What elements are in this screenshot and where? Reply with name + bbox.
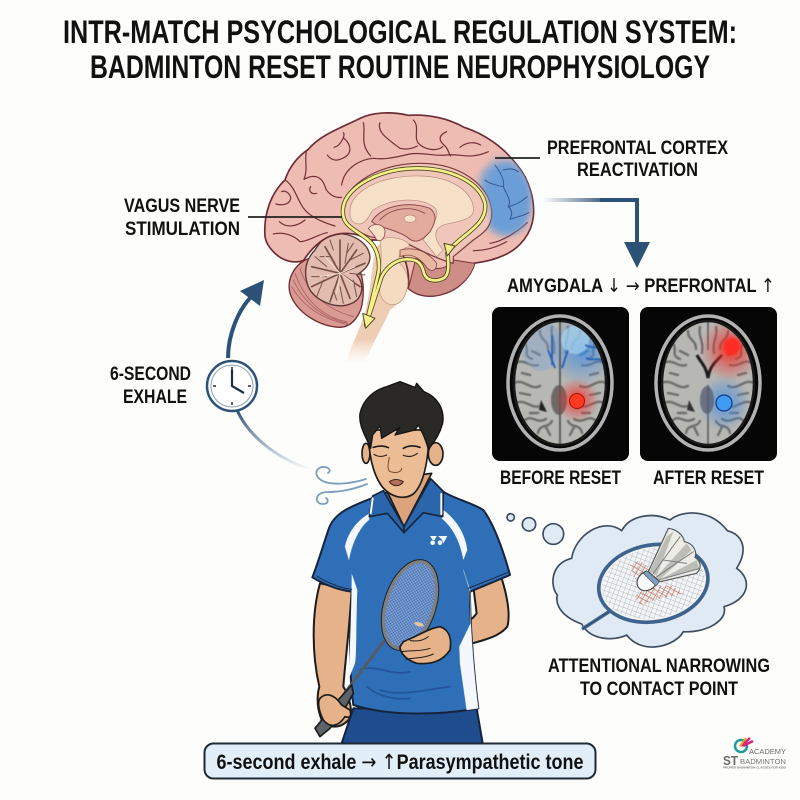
player shorts — [342, 708, 483, 743]
logo: academy badminton: BADMINTON — [740, 757, 786, 766]
icon: breath swirls — [316, 467, 367, 504]
panel: brain scan after reset — [640, 307, 777, 461]
racket close-up — [583, 536, 714, 631]
logo: academy badminton: PROPER BADMINTON CLASSES FOR KIDS — [723, 766, 786, 770]
label: vagus nerve stimulation — [124, 196, 342, 240]
shuttlecock — [637, 528, 700, 591]
cloud shape — [553, 513, 746, 647]
lower dark lobe — [408, 257, 475, 296]
callout: exhale and parasympathetic tone — [204, 744, 596, 778]
thalamus — [372, 205, 435, 241]
player hair — [360, 382, 443, 449]
label: prefrontal cortex reactivation: REACTIVATION — [577, 160, 698, 181]
label: prefrontal cortex reactivation — [495, 138, 728, 181]
logo: academy badminton: ACADEMY — [749, 747, 786, 756]
player illustration — [312, 382, 510, 743]
player face — [362, 430, 443, 497]
label: 6-second exhale: 6-SECOND — [110, 364, 191, 385]
panel: brain scan before reset — [492, 307, 629, 461]
logo: academy badminton — [723, 738, 786, 770]
label: attentional narrowing — [548, 656, 770, 700]
caption: after reset: AFTER RESET — [653, 468, 764, 489]
cerebellum — [289, 234, 370, 327]
cerebrum outline — [265, 113, 534, 296]
player right arm — [400, 578, 509, 664]
icon: clock — [207, 361, 257, 411]
callout: exhale and parasympathetic tone: 6-second exhale → ↑Parasympathetic tone — [216, 750, 584, 774]
player collar — [369, 479, 443, 533]
label: attentional narrowing: ATTENTIONAL NARROWING — [548, 656, 770, 677]
logo: academy badminton: ST — [723, 753, 738, 768]
prefrontal veins — [485, 165, 529, 219]
thought bubbles — [507, 514, 564, 544]
brainstem — [346, 241, 409, 363]
shirt logo — [430, 536, 447, 545]
label: 6-second exhale: EXHALE — [123, 387, 187, 408]
label: vagus nerve stimulation: STIMULATION — [125, 219, 240, 240]
cortical gyri folds — [273, 120, 527, 251]
midbrain and pons — [380, 238, 410, 305]
brain illustration — [265, 113, 534, 363]
corpus callosum — [350, 176, 473, 257]
prefrontal blue activation — [477, 157, 530, 237]
player neck — [382, 473, 432, 527]
player lower hand — [319, 695, 351, 725]
label: attentional narrowing: TO CONTACT POINT — [580, 679, 738, 700]
player shirt — [312, 480, 510, 714]
arrow: prefrontal to scans — [543, 200, 650, 268]
title — [63, 14, 737, 85]
player left arm — [314, 583, 352, 727]
thought cloud — [507, 513, 746, 647]
label: 6-second exhale — [110, 364, 191, 408]
caption: before reset: BEFORE RESET — [500, 468, 621, 489]
heading: amygdala to prefrontal shift: AMYGDALA ↓ → PREFRONTAL ↑ — [507, 275, 775, 297]
label: prefrontal cortex reactivation: PREFRONTAL CORTEX — [547, 138, 728, 159]
inner cingulate — [342, 163, 492, 263]
player gripping hand — [400, 622, 451, 664]
blue over cingulate — [481, 166, 530, 233]
arrow: exhale up to brain — [228, 280, 312, 470]
vagus pathway — [343, 168, 485, 328]
racket — [315, 552, 449, 737]
label: vagus nerve stimulation: VAGUS NERVE — [124, 196, 240, 217]
